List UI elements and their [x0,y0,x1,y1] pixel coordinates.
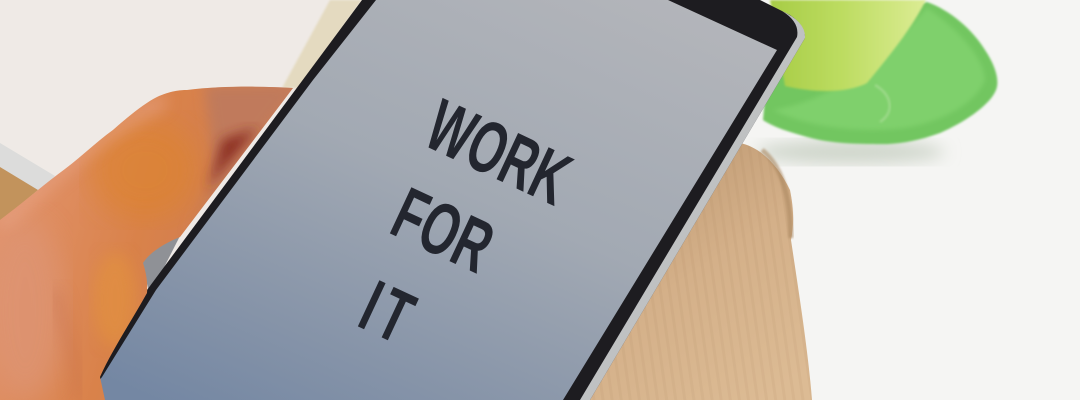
trouser ribs [585,143,812,400]
palm shadow [56,303,58,314]
wrist highlight [0,220,65,400]
thumb pad glow [90,120,200,220]
hand and thumb [0,80,300,400]
top-left white surface [0,0,400,280]
thumb far segment [202,86,293,208]
gap behind hand [140,232,182,295]
phone body [80,0,805,400]
laptop edge [282,0,362,88]
wooden surface bottom-left [0,167,38,222]
hand top highlight [0,100,165,225]
phone screen [84,0,777,400]
palm glow [93,252,137,348]
wall band bottom-left [0,143,55,192]
saucer [763,2,997,144]
phone silver edge [580,11,805,400]
saucer inner bowl [773,8,985,130]
dark crease near phone [205,128,258,190]
trousers [585,143,812,400]
saucer shadow [755,140,945,164]
word: WORK: WORK [414,84,583,222]
screen message [348,84,583,362]
saucer ring highlight [875,85,890,122]
trouser seam [762,150,791,238]
hand base [0,80,300,400]
word: FOR: FOR [380,173,505,289]
cup [770,0,926,91]
word: IT: IT [348,266,430,362]
